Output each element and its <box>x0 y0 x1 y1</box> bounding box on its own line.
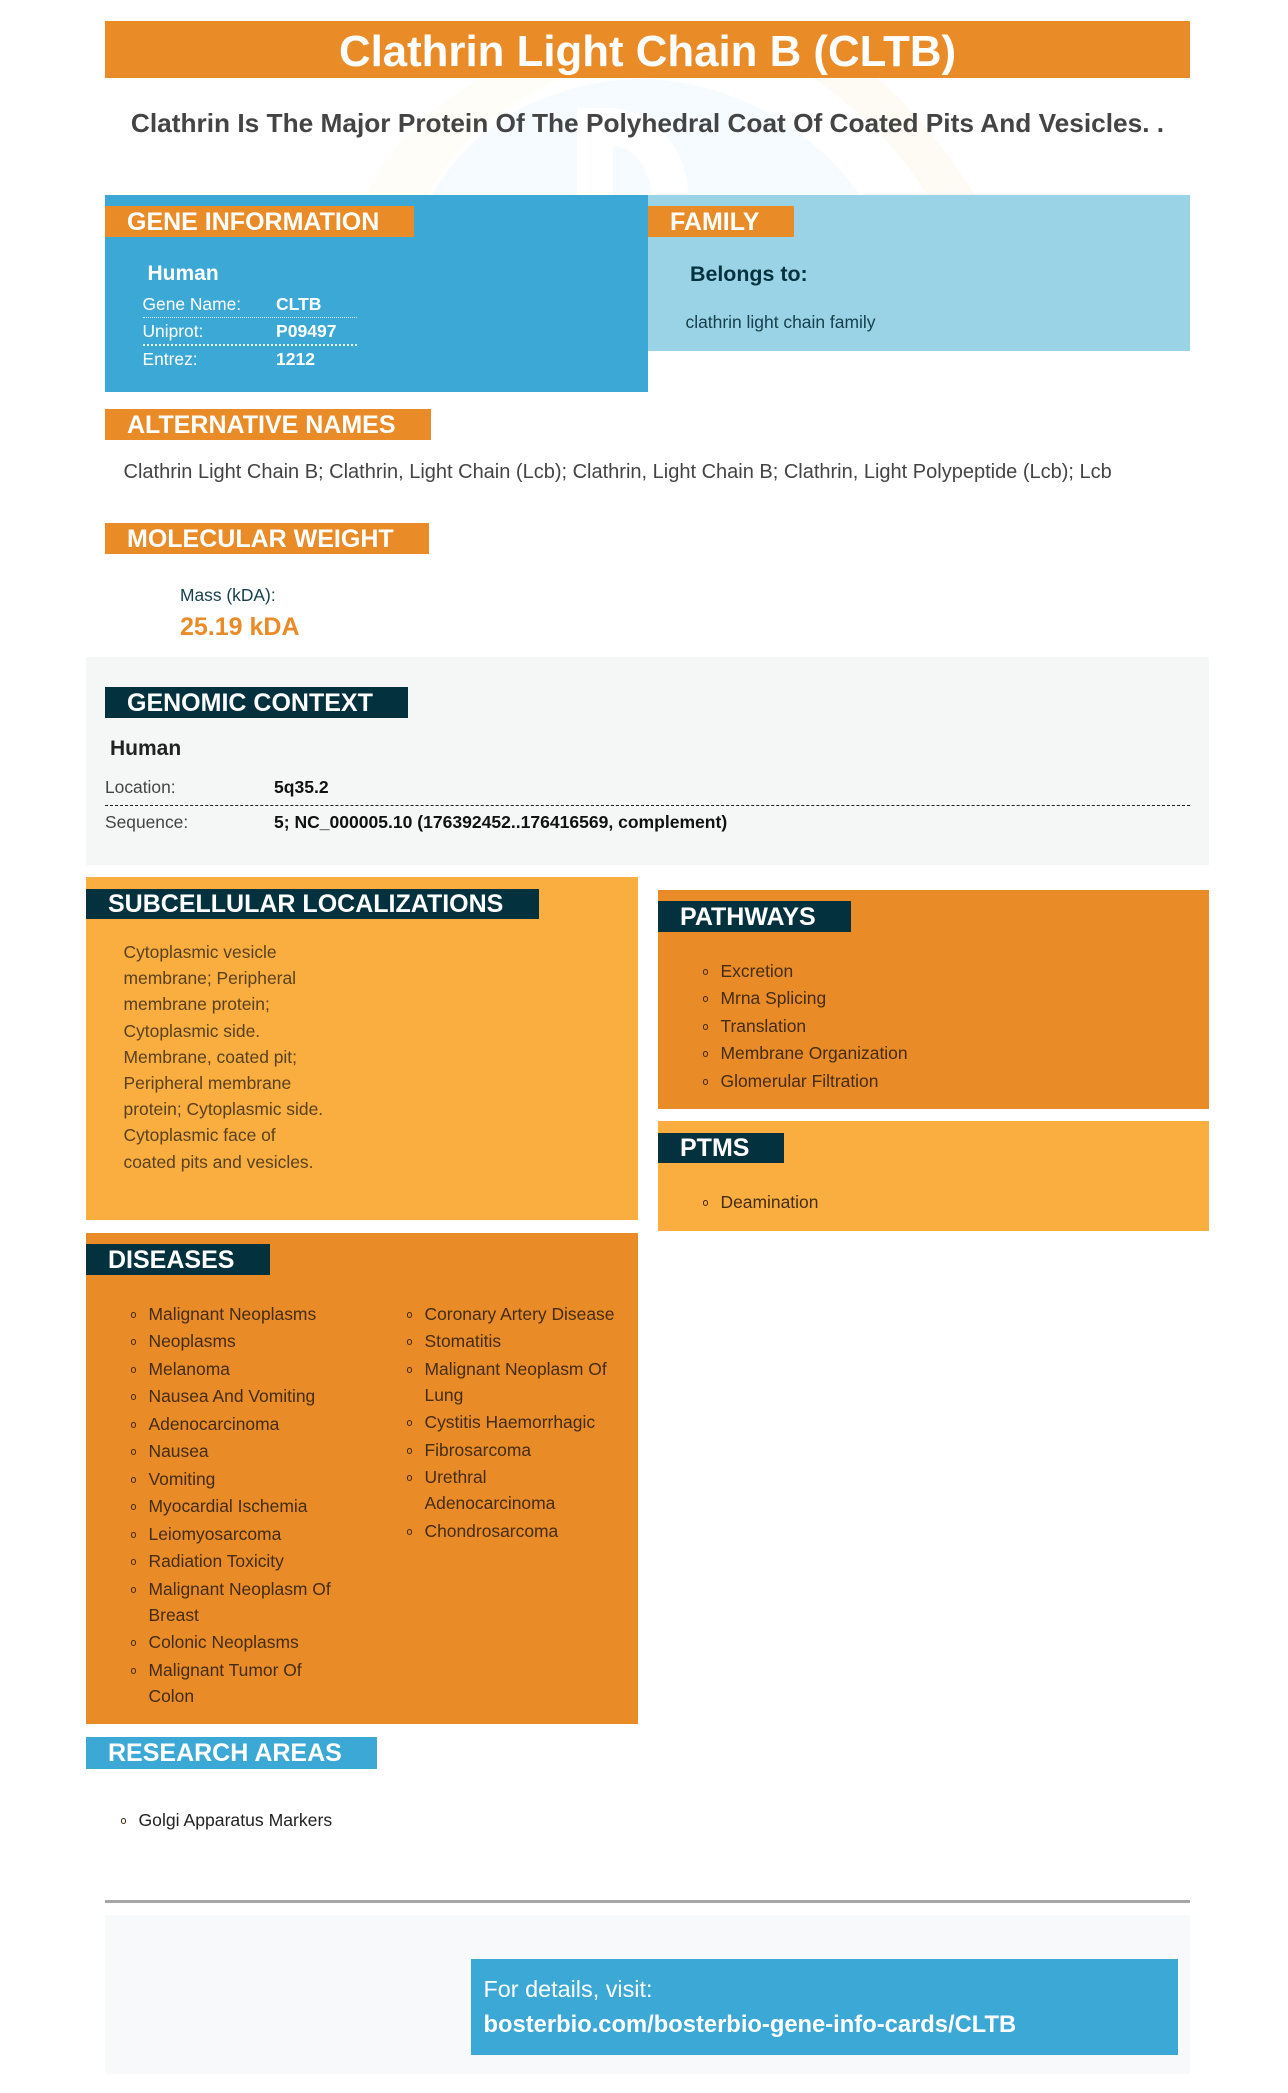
diseases list, right column: Cystitis Haemorrhagic <box>424 1412 595 1432</box>
diseases list, left column: Colonic Neoplasms <box>148 1632 299 1652</box>
heading: family: FAMILY <box>670 208 759 236</box>
callout label: For details, visit: <box>484 1976 652 2002</box>
location row <box>105 774 1190 806</box>
diseases list, left column: Malignant Tumor Of <box>148 1660 302 1680</box>
title banner <box>105 21 1190 78</box>
pathways list: Glomerular Filtration <box>720 1071 878 1091</box>
alternative names text: Clathrin Light Chain B; Clathrin, Light Chain (Lcb); Clathrin, Light Chain B; Clathrin, Light Polypeptide (Lcb); Lcb <box>124 460 1112 482</box>
heading: diseases: DISEASES <box>108 1246 234 1274</box>
pathways list <box>703 961 908 1091</box>
heading: research areas: RESEARCH AREAS <box>108 1739 342 1767</box>
diseases list, left column: Myocardial Ischemia <box>148 1496 307 1516</box>
diseases list, left column: Malignant Neoplasms <box>148 1304 316 1324</box>
diseases list, left column: Radiation Toxicity <box>148 1551 284 1571</box>
diseases list, left column: Adenocarcinoma <box>148 1414 279 1434</box>
diseases list, left column: Breast <box>148 1605 199 1625</box>
gene name row: Gene Name: <box>142 294 241 314</box>
diseases list, right column: Chondrosarcoma <box>424 1521 558 1541</box>
heading: alternative names: ALTERNATIVE NAMES <box>127 411 396 439</box>
pathways list: Membrane Organization <box>720 1043 908 1063</box>
panel: diseases <box>86 1233 638 1724</box>
diseases list, right column: Urethral <box>424 1467 487 1487</box>
entrez row <box>142 349 315 369</box>
heading: subcellular localizations: SUBCELLULAR LOCALIZATIONS <box>108 890 503 918</box>
species label: Human <box>110 737 181 760</box>
heading: pathways: PATHWAYS <box>680 903 816 931</box>
panel: gene information <box>105 195 648 392</box>
diseases list, left column: Vomiting <box>148 1469 215 1489</box>
diseases list, left column: Leiomyosarcoma <box>148 1524 281 1544</box>
research areas list: Golgi Apparatus Markers <box>138 1810 332 1830</box>
entrez row: 1212 <box>276 349 315 369</box>
species label: Human <box>148 262 219 284</box>
localization text: Cytoplasmic vesicle <box>124 942 277 962</box>
diseases list, left column <box>131 1304 331 1706</box>
family name: clathrin light chain family <box>686 312 875 332</box>
localization text: protein; Cytoplasmic side. <box>124 1099 323 1119</box>
diseases list, left column: Melanoma <box>148 1359 230 1379</box>
uniprot row <box>142 318 356 346</box>
localization text: Membrane, coated pit; <box>124 1047 297 1067</box>
localization text: membrane; Peripheral <box>124 968 296 988</box>
location row: Location: <box>105 777 176 797</box>
heading: family <box>648 206 794 237</box>
localization text: coated pits and vesicles. <box>124 1152 313 1172</box>
callout url: bosterbio.com/bosterbio-gene-info-cards/CLTB <box>484 2011 1016 2038</box>
mass value: 25.19 kDA <box>180 613 300 641</box>
diseases list, right column: Lung <box>424 1385 463 1405</box>
diseases list, right column: Malignant Neoplasm Of <box>424 1359 607 1379</box>
diseases list, left column: Malignant Neoplasm Of <box>148 1579 331 1599</box>
ptms list: Deamination <box>720 1192 818 1212</box>
title banner: Clathrin Light Chain B (CLTB) <box>339 27 956 76</box>
diseases list, right column: Stomatitis <box>424 1331 501 1351</box>
diseases list, right column: Adenocarcinoma <box>424 1493 555 1513</box>
diseases list, left column: Colon <box>148 1686 194 1706</box>
heading: molecular weight: MOLECULAR WEIGHT <box>127 525 394 553</box>
localization text: Cytoplasmic side. <box>124 1021 260 1041</box>
panel: ptms <box>658 1121 1209 1231</box>
watermark logo <box>432 78 974 195</box>
gene name row: CLTB <box>276 294 321 314</box>
panel: pathways <box>658 890 1209 1109</box>
diseases list, left column: Nausea And Vomiting <box>148 1386 315 1406</box>
gene name row <box>142 291 356 318</box>
subtitle: Clathrin Is The Major Protein Of The Polyhedral Coat Of Coated Pits And Vesicles. . <box>131 108 1164 138</box>
callout: details link <box>471 1959 1178 2055</box>
diseases list, right column <box>407 1304 614 1541</box>
sequence row: Sequence: <box>105 812 188 832</box>
heading: gene information: GENE INFORMATION <box>127 208 379 236</box>
diseases list, right column: Coronary Artery Disease <box>424 1304 614 1324</box>
heading: ptms: PTMS <box>680 1134 749 1162</box>
pathways list: Excretion <box>720 961 793 981</box>
heading: pathways <box>658 901 851 932</box>
mass label: Mass (kDA): <box>180 584 276 604</box>
diseases list, left column: Nausea <box>148 1441 209 1461</box>
panel: family <box>648 195 1190 351</box>
panel: footer <box>105 1915 1190 2074</box>
diseases list, left column: Neoplasms <box>148 1331 236 1351</box>
panel: subcellular localizations <box>86 877 638 1220</box>
heading: diseases <box>86 1244 270 1275</box>
heading: ptms <box>658 1133 784 1163</box>
diseases list, right column: Fibrosarcoma <box>424 1440 531 1460</box>
panel: genomic context <box>86 657 1209 865</box>
entrez row: Entrez: <box>142 349 198 369</box>
localization text <box>124 942 323 1172</box>
localization text: membrane protein; <box>124 994 270 1014</box>
belongs to label: Belongs to: <box>690 262 808 286</box>
uniprot row: P09497 <box>276 321 336 341</box>
uniprot row: Uniprot: <box>142 321 203 341</box>
heading: genomic context: GENOMIC CONTEXT <box>127 689 373 717</box>
localization text: Peripheral membrane <box>124 1073 291 1093</box>
location row: 5q35.2 <box>274 777 329 797</box>
pathways list: Translation <box>720 1016 806 1036</box>
sequence row: 5; NC_000005.10 (176392452..176416569, complement) <box>274 812 727 832</box>
localization text: Cytoplasmic face of <box>124 1125 276 1145</box>
pathways list: Mrna Splicing <box>720 988 826 1008</box>
